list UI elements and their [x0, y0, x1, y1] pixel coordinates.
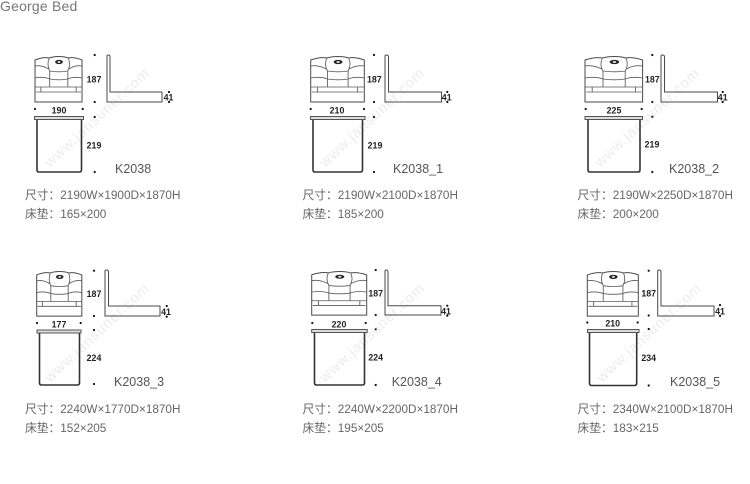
- dimension labels: 187: [367, 74, 382, 84]
- mattress spec: 床垫：200×200: [578, 207, 659, 221]
- dimension labels: [607, 74, 728, 150]
- side elevation: [385, 270, 441, 315]
- model code: K2038_3: [114, 375, 164, 389]
- dimension labels: 177: [52, 320, 66, 330]
- size spec: 尺寸：2190W×2250D×1870H: [578, 188, 733, 202]
- dimension labels: [332, 288, 451, 362]
- panel: K2038_4: [302, 269, 458, 435]
- plan view: [34, 116, 84, 172]
- watermark: www.jansuner.com: [316, 280, 428, 387]
- dimension labels: [330, 74, 452, 150]
- side elevation: [107, 55, 162, 102]
- size spec: 尺寸：2190W×2100D×1870H: [302, 188, 458, 202]
- plan view: [312, 330, 367, 385]
- panel: K2038_1: [302, 54, 458, 221]
- dimension labels: 187: [87, 289, 101, 299]
- mattress spec: 床垫：185×200: [302, 207, 384, 221]
- dimension labels: 187: [645, 74, 660, 84]
- dimension labels: 219: [87, 140, 101, 150]
- panel: K2038_5: [578, 270, 733, 435]
- dimension labels: 41: [442, 92, 452, 102]
- front elevation: [311, 56, 364, 102]
- panel: K2038_3: [25, 270, 180, 435]
- dimension marks: [585, 54, 724, 173]
- model code: K2038_4: [392, 375, 442, 389]
- size spec: 尺寸：2240W×2200D×1870H: [302, 402, 458, 416]
- dimension labels: [605, 288, 725, 363]
- mattress spec: 床垫：195×205: [302, 421, 384, 435]
- plan view: [588, 330, 639, 386]
- model code: K2038: [115, 162, 151, 176]
- dimension marks: [586, 270, 721, 387]
- dimension marks: [34, 54, 170, 173]
- dimension labels: 41: [161, 307, 171, 317]
- dimension labels: 41: [715, 306, 725, 316]
- watermark: www.jansuner.com: [41, 65, 153, 172]
- watermark: www.jansuner.com: [593, 280, 705, 387]
- dimension labels: 190: [52, 106, 66, 116]
- dimension marks: [36, 270, 168, 385]
- watermark: www.jansuner.com: [591, 65, 703, 172]
- front elevation: [312, 271, 367, 315]
- dimension labels: 219: [645, 140, 659, 150]
- plan view: [585, 116, 642, 172]
- front elevation: [37, 271, 82, 316]
- dimension labels: 41: [718, 92, 728, 102]
- mattress spec: 床垫：183×215: [578, 421, 659, 435]
- plan view: [37, 330, 81, 385]
- size spec: 尺寸：2340W×2100D×1870H: [578, 402, 733, 416]
- panel: K2038: [25, 54, 180, 221]
- dimension labels: 224: [87, 353, 101, 363]
- size spec: 尺寸：2240W×1770D×1870H: [25, 402, 180, 416]
- front elevation: [35, 56, 82, 102]
- model code: K2038_1: [393, 162, 443, 176]
- dimension marks: [310, 54, 448, 173]
- dimension labels: 187: [87, 74, 101, 84]
- size spec: 尺寸：2190W×1900D×1870H: [25, 188, 180, 202]
- watermark: www.jansuner.com: [316, 65, 428, 172]
- plan view: [310, 116, 365, 172]
- dimension labels: 187: [641, 288, 656, 298]
- mattress spec: 床垫：152×205: [25, 421, 107, 435]
- dimension labels: 187: [368, 288, 383, 298]
- dimension labels: 210: [330, 106, 344, 116]
- side elevation: [385, 55, 442, 102]
- dimension labels: [52, 289, 171, 363]
- dimension labels: 220: [332, 320, 346, 330]
- dimension marks: [311, 269, 448, 386]
- dimension labels: 234: [641, 353, 656, 363]
- model code: K2038_2: [669, 162, 719, 176]
- dimension labels: 224: [368, 352, 383, 362]
- panel: K2038_2: [578, 54, 733, 221]
- front elevation: [585, 56, 643, 102]
- dimension labels: 41: [164, 92, 173, 102]
- watermark: www.jansuner.com: [41, 280, 153, 387]
- model code: K2038_5: [670, 375, 720, 389]
- side elevation: [105, 270, 160, 316]
- dimension labels: 219: [368, 140, 382, 150]
- side elevation: [661, 55, 718, 102]
- front elevation: [587, 271, 638, 316]
- dimension labels: 210: [605, 318, 620, 328]
- dimension labels: 225: [607, 106, 621, 116]
- dimension labels: [52, 74, 173, 150]
- mattress spec: 床垫：165×200: [25, 207, 107, 221]
- dimension labels: 41: [441, 306, 451, 316]
- side elevation: [658, 270, 714, 316]
